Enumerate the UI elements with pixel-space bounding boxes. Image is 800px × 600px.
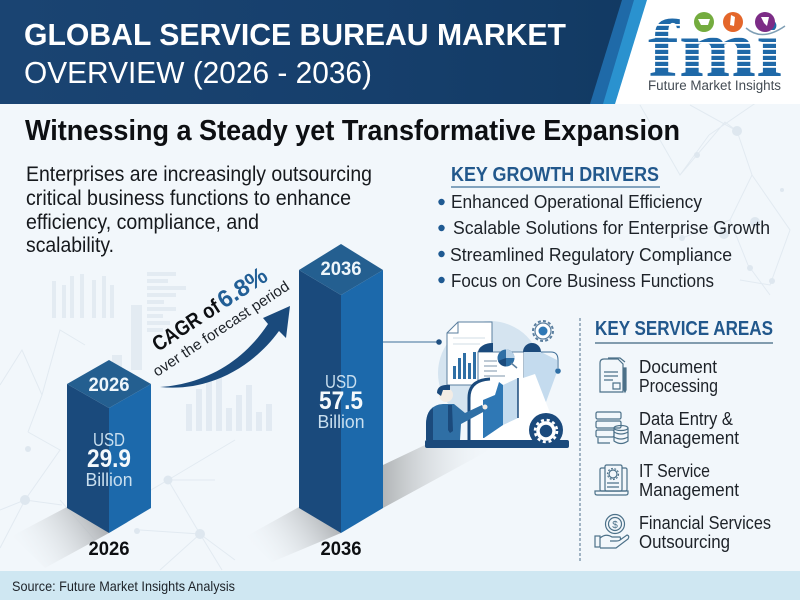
document with bar chart	[447, 322, 492, 385]
service: data entry and management: Data Entry &	[639, 409, 733, 429]
heading: subtitle line: OVERVIEW (2026 - 2036)	[24, 55, 372, 90]
callout: CAGR: CAGR of	[148, 295, 225, 356]
service: document processing: Processing	[639, 376, 718, 396]
heading: key growth drivers: KEY GROWTH DRIVERS	[451, 163, 659, 186]
bar: 2026 value column: Billion	[86, 470, 132, 490]
logo: Future Market Insights: Future Market Insights	[648, 78, 781, 93]
background chart: faded bars centre	[186, 378, 272, 431]
panel: key service areas	[595, 317, 773, 552]
service: document processing	[600, 357, 718, 396]
intro paragraph	[26, 163, 372, 257]
bar: 2026 value column: USD	[93, 430, 125, 450]
icon: laptop with gear	[595, 465, 628, 495]
service: document processing: Document	[639, 357, 717, 377]
driver list	[438, 191, 770, 291]
bar: 2036 value column: 57.5	[319, 387, 363, 415]
callout: CAGR: 6.8%	[213, 262, 273, 314]
icon: server and database	[596, 412, 628, 444]
bar: 2036 value column: USD	[325, 372, 357, 392]
heading: main title line: GLOBAL SERVICE BUREAU MARKET	[24, 17, 566, 52]
axis label 2036: 2036	[320, 539, 362, 560]
base and gear wheel	[425, 440, 569, 448]
header banner	[0, 0, 800, 104]
front panel	[470, 374, 556, 440]
report with pie chart	[478, 343, 541, 396]
service: financial services outsourcing: Outsourcing	[639, 532, 730, 552]
driver list: Scalable Solutions for Enterprise Growth	[453, 217, 770, 238]
icon: document	[600, 358, 626, 392]
bar: 2026 value column	[67, 360, 151, 533]
background chart: faded bars left	[52, 272, 186, 377]
intro paragraph: critical business functions to enhance	[26, 187, 351, 210]
panel: key growth drivers	[438, 163, 770, 291]
footer band	[0, 571, 800, 600]
bar: 2026 value column: 29.9	[87, 445, 131, 473]
connector line to illustration	[383, 339, 442, 345]
logo: Future Market Insights: fmi	[648, 3, 782, 94]
service: IT service management	[595, 461, 739, 500]
service: IT service management: Management	[639, 480, 739, 500]
intro paragraph: Enterprises are increasingly outsourcing	[26, 163, 372, 186]
bar: 2036 value column: 2036	[320, 259, 362, 280]
main heading: Witnessing a Steady yet Transformative Expansion	[25, 115, 680, 147]
driver list: Streamlined Regulatory Compliance	[450, 244, 732, 265]
driver list: Focus on Core Business Functions	[451, 270, 714, 291]
intro paragraph: efficiency, compliance, and	[26, 211, 259, 234]
arrow: growth	[160, 306, 290, 388]
bar shadow 2026	[12, 507, 109, 568]
scroll panel	[524, 352, 557, 402]
person	[426, 385, 488, 440]
source note: Source: Future Market Insights Analysis	[12, 578, 235, 594]
bar shadow 2036	[245, 445, 495, 562]
callout: CAGR: over the forecast period	[150, 278, 293, 380]
service: financial services outsourcing: Financial Services	[639, 513, 771, 533]
service: financial services outsourcing	[595, 513, 771, 552]
intro paragraph: scalability.	[26, 234, 114, 257]
service: data entry and management	[596, 409, 739, 448]
driver list: Enhanced Operational Efficiency	[451, 191, 703, 212]
bar: 2036 value column: Billion	[318, 412, 364, 432]
axis label 2026: 2026	[88, 539, 130, 560]
bar: 2026 value column: 2026	[88, 375, 130, 396]
bar: 2036 value column	[299, 244, 383, 533]
gear icon	[533, 321, 553, 341]
icon: hand with coin: $	[612, 520, 618, 531]
icon: hand with coin	[595, 514, 629, 548]
service: IT service management: IT Service	[639, 461, 710, 481]
service: data entry and management: Management	[639, 428, 739, 448]
dashed divider	[579, 318, 581, 562]
illustration: analyst with documents	[425, 321, 569, 448]
